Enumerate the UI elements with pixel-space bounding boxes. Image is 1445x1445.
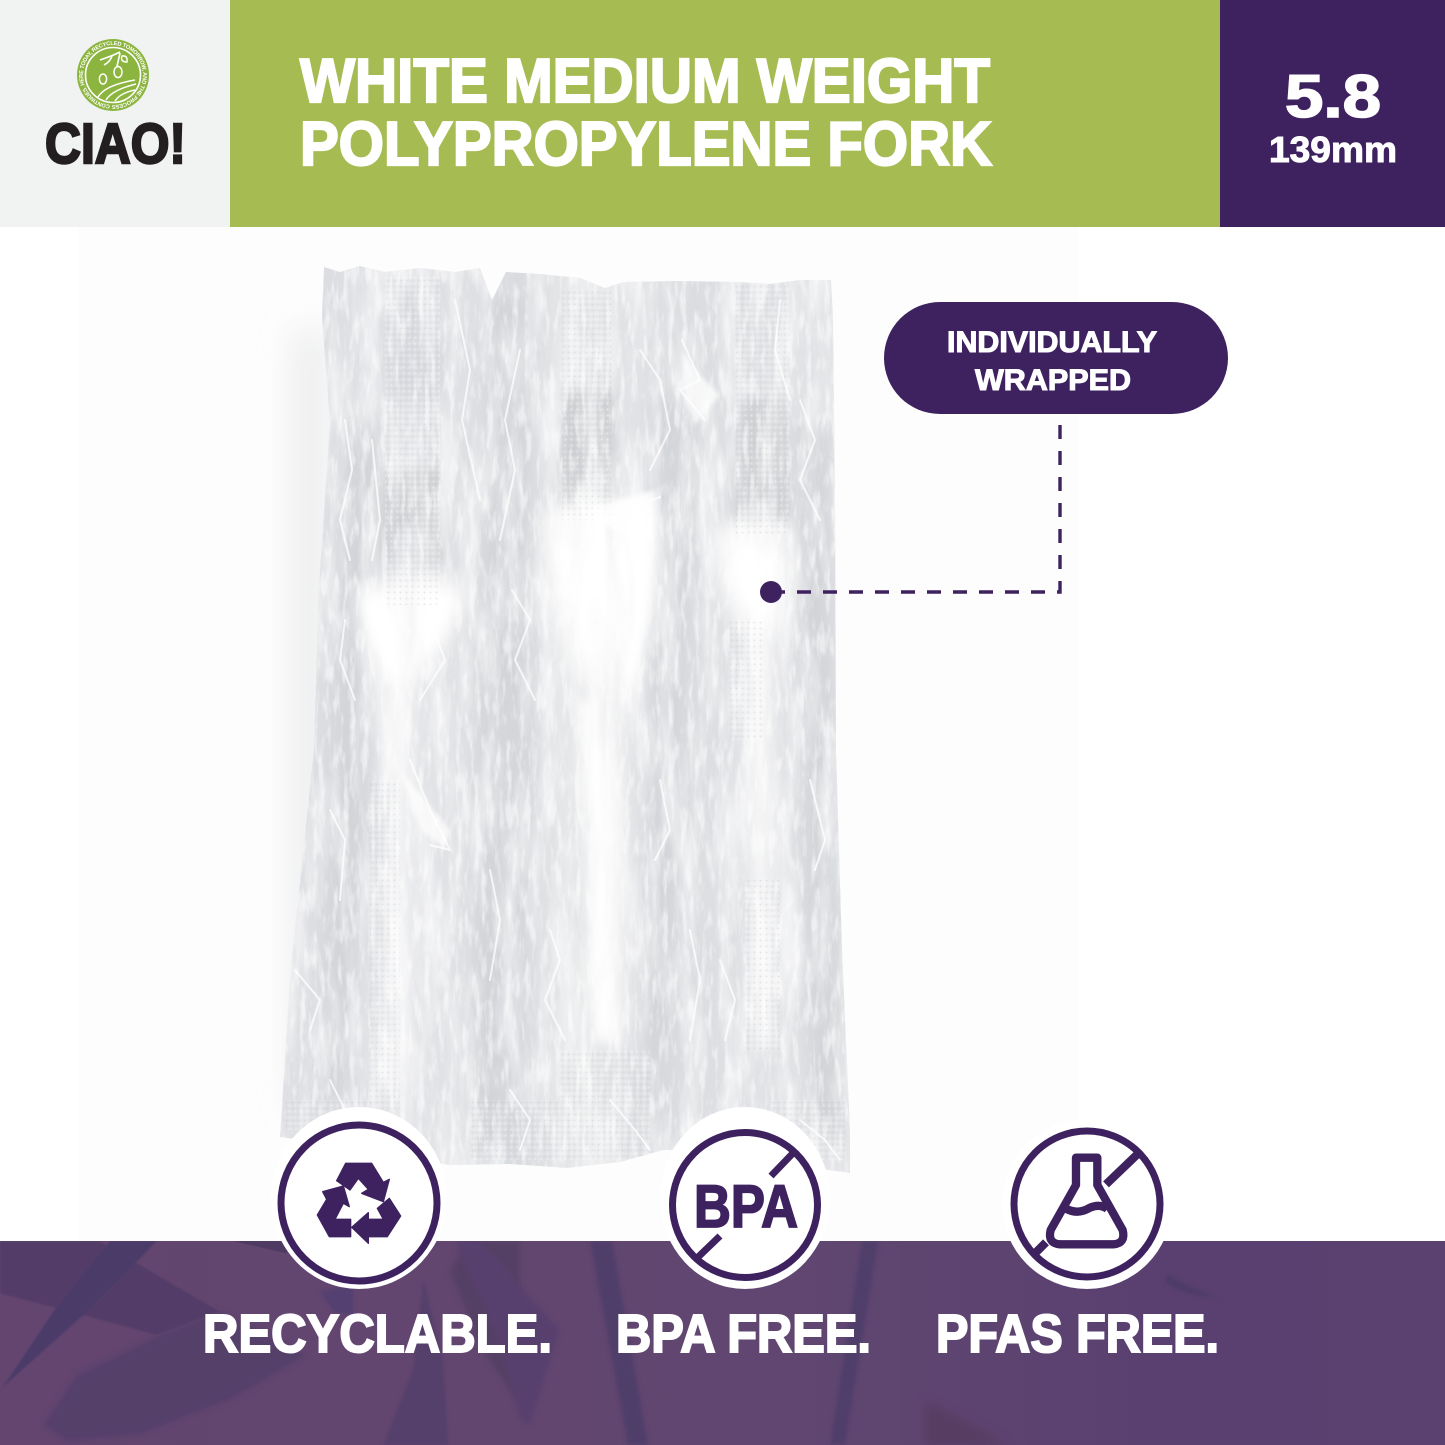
header: title panel	[230, 0, 1220, 227]
bag texture	[409, 530, 618, 830]
callout text line 2: WRAPPED	[975, 364, 1131, 397]
BPA lettering: BPA	[694, 1173, 798, 1240]
title line 1: WHITE MEDIUM WEIGHT	[300, 47, 990, 116]
callout text line 1: INDIVIDUALLY	[947, 326, 1157, 359]
badge: PFAS free	[1002, 1119, 1172, 1289]
product photo: wrapped forks	[270, 260, 860, 1180]
film sheen patches	[400, 350, 720, 848]
callout pill	[884, 302, 1228, 414]
label: recyclable: RECYCLABLE.	[203, 1304, 552, 1364]
badge ring	[1014, 1131, 1160, 1277]
header: logo panel	[0, 0, 230, 227]
label: PFAS free: PFAS FREE.	[936, 1304, 1219, 1364]
badge halo	[660, 1107, 830, 1289]
size in inches: 5.8	[1285, 63, 1381, 130]
badge: BPA free	[660, 1107, 830, 1289]
badge: recyclable	[271, 1107, 447, 1289]
badge ring	[281, 1125, 437, 1281]
callout: individually wrapped	[760, 302, 1228, 603]
fork tines	[378, 390, 790, 565]
title line 2: POLYPROPYLENE FORK	[300, 110, 992, 179]
icon: crossed flask	[1036, 1153, 1138, 1252]
icon: olive seal: CONTINUES. HERE TODAY, RECYCLED TOMORROW, AND THE PROCESS	[79, 41, 147, 109]
callout leader line	[771, 414, 1060, 592]
film highlights	[295, 300, 840, 1160]
icon: recycle arrows	[317, 1163, 401, 1243]
darker folds	[320, 270, 845, 1150]
badge ring	[672, 1132, 818, 1278]
callout marker dot	[760, 581, 782, 603]
logo wordmark: CIAO!	[45, 112, 186, 176]
embossed mesh seams	[285, 275, 845, 1160]
badge halo	[271, 1107, 447, 1289]
leaf shadows	[0, 1241, 1221, 1445]
prohibition slash	[695, 1150, 796, 1260]
fork bodies	[357, 500, 792, 1090]
size in millimetres: 139mm	[1269, 129, 1397, 170]
bottom band	[0, 1241, 1445, 1445]
header: size panel	[1220, 0, 1445, 227]
badge halo	[1002, 1119, 1172, 1289]
label: BPA free: BPA FREE.	[616, 1304, 871, 1364]
